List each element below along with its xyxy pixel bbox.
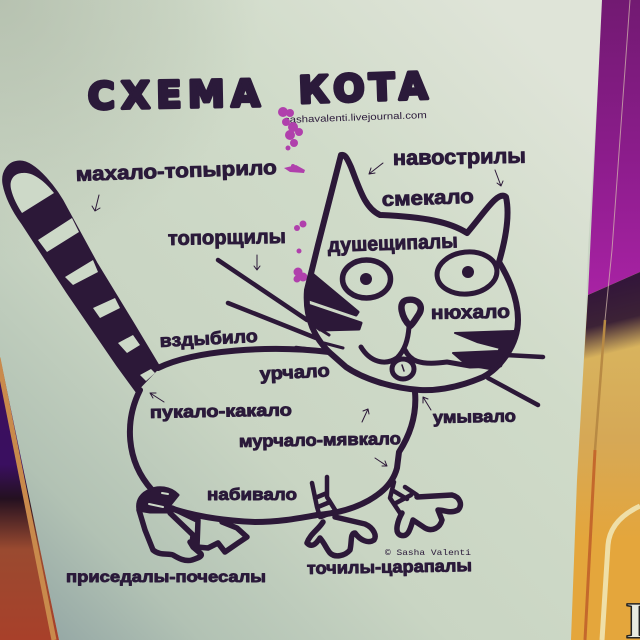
label: урчало: урчало — [259, 360, 330, 384]
panel: cream outline on golden poster — [602, 506, 640, 640]
cat drawing — [3, 155, 543, 561]
copyright: © Sasha Valenti — [385, 548, 471, 558]
label: вздыбило: вздыбило — [159, 326, 258, 351]
website url: sashavalenti.livejournal.com — [284, 110, 427, 126]
front paw middle — [307, 477, 375, 556]
tail — [3, 161, 160, 392]
label: топорщилы: топорщилы — [168, 226, 286, 250]
panel: paper top-left shading — [0, 0, 270, 270]
nose and mouth — [361, 300, 500, 379]
label: набивало: набивало — [207, 485, 297, 504]
right whiskers and stripes — [453, 331, 543, 405]
panel: purple poster on the right — [588, 0, 640, 295]
label: нюхало: нюхало — [431, 302, 510, 324]
title — [87, 65, 429, 118]
label: пукало-какало: пукало-какало — [150, 401, 292, 422]
back paw — [138, 488, 247, 561]
label: мурчало-мявкало: мурчало-мявкало — [239, 429, 401, 451]
panel: golden poster on the right — [571, 272, 640, 640]
title: СХЕМА — [87, 72, 260, 118]
label: умывало: умывало — [433, 407, 516, 427]
label: навострилы: навострилы — [393, 145, 526, 170]
arrows — [92, 163, 503, 466]
head outline — [307, 155, 518, 390]
label: махало-топырило: махало-топырило — [75, 157, 277, 186]
label: смекало: смекало — [381, 186, 474, 211]
panel: dark band on the poster — [584, 272, 640, 360]
label: точилы-царапалы: точилы-царапалы — [307, 556, 472, 578]
panel: poster edge on the left — [0, 357, 59, 640]
body outline — [130, 349, 415, 522]
eyes — [342, 249, 499, 298]
label: приседалы-почесалы: приседалы-почесалы — [66, 569, 266, 586]
front paw right — [390, 482, 460, 536]
pink stains — [278, 107, 308, 282]
label: душещипалы: душещипалы — [327, 230, 458, 257]
panel: poster vertical fold lines — [585, 0, 630, 640]
title: КОТА — [298, 65, 429, 112]
left whiskers and stripes — [218, 260, 361, 352]
panel: orange edge strip — [0, 358, 54, 640]
